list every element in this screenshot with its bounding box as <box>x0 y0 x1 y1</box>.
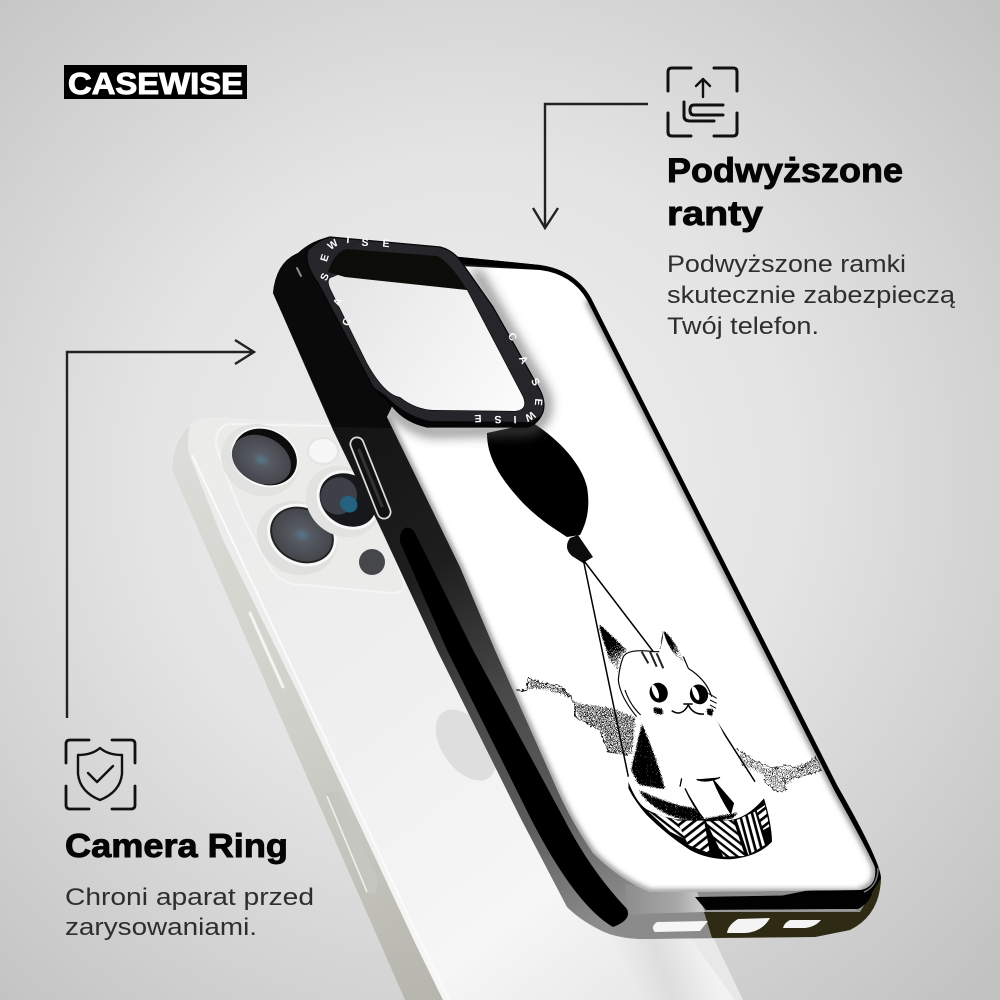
balloon <box>487 423 588 537</box>
inner shadow along screen edge <box>387 300 875 892</box>
apple logo <box>423 698 509 792</box>
arrow: camera ring <box>67 340 254 718</box>
ring lettering: A <box>331 296 345 308</box>
ring lettering: I <box>513 413 517 425</box>
lidar sensor <box>359 549 385 575</box>
white edge highlight <box>192 455 449 1000</box>
phone titanium side edge <box>172 425 443 1000</box>
bottom thin highlight <box>706 910 856 911</box>
icon: raised edges <box>668 68 737 136</box>
lens: right <box>292 451 395 552</box>
speaker opening <box>653 921 708 932</box>
right smoke <box>737 749 822 793</box>
bottom right gloss <box>864 868 878 892</box>
cat outline <box>618 651 712 717</box>
bottom black stripe <box>695 894 872 910</box>
flank shading <box>631 722 666 790</box>
basket <box>628 782 772 860</box>
bottom face left grey <box>614 912 712 939</box>
ring lettering: E <box>318 253 332 263</box>
ring frame <box>307 237 544 427</box>
cat body <box>618 630 753 820</box>
camera ring <box>307 234 546 432</box>
light glass at bottom left of case <box>625 884 705 914</box>
ring inner top wall <box>328 249 467 290</box>
illustration: balloon with cat <box>487 423 822 867</box>
microphone opening <box>783 920 821 928</box>
eyes <box>647 680 671 705</box>
lower side button <box>327 792 378 895</box>
ring lettering: S <box>318 271 332 283</box>
cheeks <box>653 707 713 717</box>
ring lettering: C <box>505 331 519 344</box>
ring lettering: E <box>382 238 390 250</box>
heading: camera ring: Camera Ring <box>65 827 288 864</box>
head stripes <box>642 652 663 668</box>
balloon tassel <box>567 535 593 563</box>
right and top black rim <box>440 255 881 900</box>
ring lettering: I <box>346 234 350 246</box>
volume button <box>357 444 384 512</box>
ring lettering: C <box>340 316 354 328</box>
text: camera ring description <box>65 884 314 941</box>
lens: bottom <box>244 487 350 589</box>
lower side button highlight <box>327 796 367 892</box>
case body silhouette <box>273 237 881 939</box>
ring lettering: W <box>523 408 537 424</box>
ring hole interior <box>329 274 524 411</box>
whiskers <box>708 693 717 708</box>
cat drawing <box>517 560 822 867</box>
text: raised edges description: skutecznie zabezpieczą <box>667 282 956 309</box>
heading: raised edges: Podwyższone <box>667 152 903 190</box>
black clear phone case <box>273 237 881 939</box>
text: raised edges description <box>667 251 956 340</box>
charging port opening <box>727 918 770 933</box>
flash <box>308 438 338 464</box>
bottom soft shadow on phone back <box>610 938 735 1000</box>
ring lettering <box>318 234 544 425</box>
ring lettering: E <box>532 398 544 406</box>
text: camera ring description: Chroni aparat przed <box>65 884 314 911</box>
upper side button <box>250 613 283 687</box>
ring lettering: S <box>361 237 369 249</box>
smile <box>672 704 704 714</box>
strings <box>583 560 755 782</box>
camera plateau <box>216 424 404 593</box>
ring lettering: S <box>528 376 542 388</box>
lens: top <box>209 411 312 509</box>
left ear <box>598 623 628 675</box>
bottom face olive <box>703 878 881 938</box>
ring outer lower edge <box>373 387 541 427</box>
arrow: raised edges <box>533 104 648 228</box>
text: raised edges description: Podwyższone ramki <box>667 251 906 278</box>
ring soft shadow <box>375 270 546 432</box>
side ridge highlight <box>297 268 301 276</box>
phone back body <box>172 417 743 1000</box>
heading: raised edges: ranty <box>667 195 763 233</box>
text: camera ring description: zarysowaniami. <box>65 914 257 941</box>
white screen printing area <box>387 266 875 892</box>
ring lettering: S <box>494 413 502 425</box>
bottom shading <box>637 788 740 822</box>
logo: CASEWISE: CASEWISE <box>68 66 243 101</box>
text: raised edges description: Twój telefon. <box>667 313 819 340</box>
ring lettering: A <box>516 354 530 367</box>
left smoke <box>517 678 637 755</box>
icon: shield <box>66 740 135 809</box>
white iPhone behind the case <box>172 411 743 1000</box>
ring lettering: E <box>474 412 482 424</box>
ring lettering: W <box>325 237 341 253</box>
right ear <box>659 630 687 665</box>
inner black band on left side <box>400 528 628 927</box>
upper solid black side of case <box>273 237 400 428</box>
feet and tail <box>680 777 733 818</box>
heading: raised edges <box>667 152 903 233</box>
